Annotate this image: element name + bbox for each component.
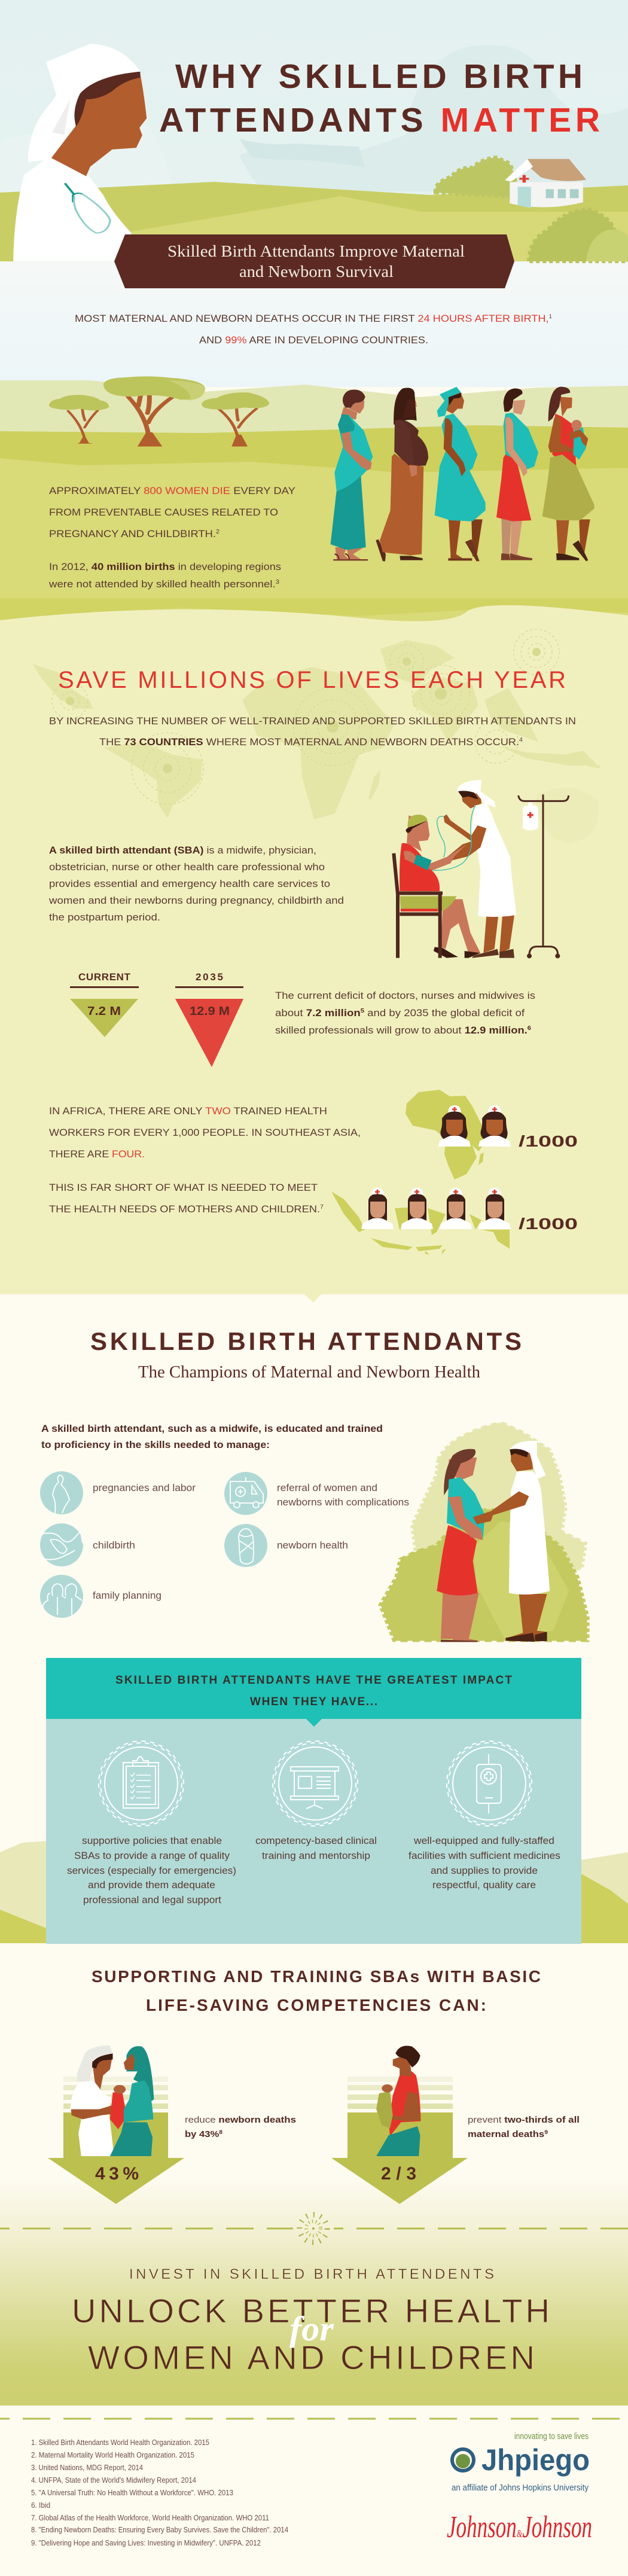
references: 5. "A Universal Truth: No Health Without a Workforce". WHO. 2013 — [31, 2488, 233, 2497]
heading: supporting and training: SUPPORTING AND TRAINING SBAs WITH BASIC — [92, 1967, 541, 1986]
map: Southeast Asia with four nurses — [331, 1188, 578, 1255]
divider — [0, 2418, 628, 2420]
text: Africa and Southeast Asia: IN AFRICA, THERE ARE ONLY TWO TRAINED HEALTH — [49, 1105, 327, 1117]
references: 1. Skilled Birth Attendants World Health Organization. 2015 — [31, 2438, 209, 2447]
heading: supporting and training: LIFE-SAVING COMPETENCIES CAN: — [146, 1996, 486, 2014]
text: 40 million births: were not attended by skilled health personnel. — [49, 579, 250, 590]
illustration: midwife with pregnant woman and bushes — [380, 1422, 587, 1642]
text: facilities: and supplies to provide — [431, 1865, 538, 1876]
woman 1 — [331, 389, 373, 560]
label: pregnancies and labor: pregnancies and labor — [93, 1483, 196, 1493]
text: facilities: facilities with sufficient medicines — [408, 1851, 560, 1861]
text: Africa and Southeast Asia — [49, 1105, 361, 1215]
text: deficit: skilled professionals will grow to about 12.9 million. — [275, 1025, 521, 1036]
panel heading: WHEN THEY HAVE... — [250, 1696, 377, 1708]
midwife — [70, 2045, 118, 2156]
IV stand — [519, 794, 569, 958]
label: referral: referral of women and — [277, 1483, 377, 1493]
clouds — [0, 45, 628, 191]
text: Africa and Southeast Asia: 7 — [320, 1204, 324, 1211]
icon: ambulance referral — [224, 1472, 267, 1515]
label: referral — [277, 1483, 409, 1508]
hills behind impact panel — [0, 1841, 628, 1943]
title: WHY SKILLED BIRTH — [175, 57, 583, 96]
text: policies: SBAs to provide a range of quality — [74, 1851, 230, 1861]
logo: Jhpiego: innovating to save lives — [514, 2431, 589, 2441]
stethoscope — [65, 183, 75, 195]
background: hero sky — [0, 0, 628, 261]
text: reduce newborn deaths: by 43% — [185, 2130, 215, 2139]
figure: midwife portrait — [13, 44, 147, 261]
text: deficit: 5 — [361, 1008, 365, 1014]
title: ATTENDANTS MATTER — [159, 101, 600, 139]
2035 label: 2035 — [196, 971, 223, 983]
woman 5 — [542, 387, 595, 561]
ornament: starburst divider — [0, 2215, 628, 2242]
woman 2 — [376, 388, 428, 561]
text: Africa and Southeast Asia: THERE ARE FOUR. — [49, 1148, 145, 1160]
text: policies: and provide them adequate — [88, 1880, 215, 1891]
heading: unlock better health: WOMEN AND CHILDREN — [88, 2339, 535, 2376]
text: policies: professional and legal support — [83, 1895, 221, 1906]
logo: Johnson and Johnson: Johnson&Johnson — [447, 2510, 592, 2544]
text: training — [255, 1836, 377, 1861]
text: 73 countries: THE 73 COUNTRIES WHERE MOST MATERNAL AND NEWBORN DEATHS OCCUR. — [99, 736, 499, 748]
background: closing gradient — [0, 2177, 628, 2406]
notch: section pointer — [304, 1294, 321, 1303]
banner: subtitle: Skilled Birth Attendants Improve Maternal — [167, 242, 465, 260]
text: deficit: 6 — [528, 1025, 531, 1032]
text: prevent two-thirds — [468, 2115, 580, 2139]
text: facilities: well-equipped and fully-staffed — [413, 1836, 554, 1846]
text: 800 women: FROM PREVENTABLE CAUSES RELATED TO — [49, 507, 278, 518]
text: reduce newborn deaths: 8 — [219, 2129, 222, 2135]
text: invest: INVEST IN SKILLED BIRTH ATTENDENTS — [129, 2266, 494, 2282]
logo: Jhpiego — [452, 2431, 590, 2493]
patient — [400, 815, 480, 958]
text: training: training and mentorship — [262, 1851, 370, 1861]
background: lower savanna and map area — [0, 616, 628, 1294]
text: skills intro: to proficiency in the skills needed to manage: — [41, 1440, 270, 1450]
label: childbirth: childbirth — [93, 1540, 135, 1551]
text: policies: services (especially for emergencies) — [67, 1865, 236, 1876]
text: SBA definition: A skilled birth attendant (SBA) is a midwife, physician, — [49, 845, 316, 856]
icon: childbirth — [40, 1523, 83, 1566]
heading: save millions: SAVE MILLIONS OF LIVES EACH YEAR — [58, 667, 566, 693]
arrow: two-thirds with mother: 2/3 — [381, 2164, 416, 2184]
map: Africa with two nurses: /1000 — [519, 1132, 578, 1150]
references — [31, 2438, 288, 2547]
text: deficit: about 7.2 million — [275, 1008, 354, 1019]
triangle: current: 7.2 M — [87, 1005, 121, 1018]
panel heading: SKILLED BIRTH ATTENDANTS HAVE THE GREATEST IMPACT — [115, 1674, 512, 1687]
logo: Jhpiego: Jhpiego — [481, 2443, 590, 2477]
chart: workforce deficit — [70, 971, 243, 1067]
2035 label — [175, 971, 243, 988]
map: Africa with two nurses — [406, 1090, 578, 1179]
hills: savanna — [0, 380, 628, 634]
text: deficit — [275, 990, 535, 1036]
panel heading — [115, 1674, 512, 1708]
text: 800 women — [49, 485, 295, 539]
text: SBA definition: obstetrician, nurse or other health care professional who — [49, 862, 325, 873]
chair back — [394, 853, 398, 958]
references: 4. UNFPA, State of the World's Midwifery Report, 2014 — [31, 2476, 196, 2484]
subheading: champions: The Champions of Maternal and Newborn Health — [138, 1362, 480, 1382]
heading: skilled birth attendants: SKILLED BIRTH ATTENDANTS — [90, 1327, 522, 1355]
badge: policies clipboard — [99, 1741, 184, 1826]
hills: hero — [0, 157, 628, 261]
headscarf — [28, 44, 141, 162]
text: Africa and Southeast Asia: WORKERS FOR EVERY 1,000 PEOPLE. IN SOUTHEAST ASIA, — [49, 1127, 361, 1138]
text: deficit: The current deficit of doctors, nurses and midwives is — [275, 990, 535, 1001]
white coat — [13, 157, 132, 261]
heading: unlock better health: UNLOCK BETTER HEALTH — [72, 2292, 550, 2330]
references: 7. Global Atlas of the Health Workforce, World Health Organization. WHO 2011 — [31, 2513, 269, 2522]
pregnant woman — [437, 1449, 485, 1642]
mother — [110, 2046, 154, 2156]
text: 800 women: 2 — [216, 529, 220, 535]
current label: CURRENT — [78, 971, 131, 983]
badge: facilities IV bag — [447, 1741, 532, 1826]
text: skills intro: A skilled birth attendant, such as a midwife, is educated and trained — [41, 1423, 383, 1434]
icon: family planning — [40, 1575, 83, 1618]
text: SBA definition: provides essential and emergency health care services to — [49, 879, 330, 889]
badge: training presentation board — [273, 1741, 358, 1826]
hair — [74, 72, 140, 127]
text: Africa and Southeast Asia: THE HEALTH NEEDS OF MOTHERS AND CHILDREN. — [49, 1203, 301, 1215]
background: pale band under hero — [0, 261, 628, 387]
map: Southeast Asia with four nurses: /1000 — [519, 1215, 578, 1233]
text: 800 women: APPROXIMATELY 800 WOMEN DIE EVERY DAY — [49, 485, 295, 496]
text: 40 million births — [48, 562, 281, 590]
text: reduce newborn deaths — [185, 2115, 296, 2139]
label: newborn health: newborn health — [277, 1540, 348, 1551]
text: 73 countries — [49, 715, 576, 748]
references: 3. United Nations, MDG Report, 2014 — [31, 2463, 143, 2472]
figures: five pregnant women in a line — [331, 387, 595, 561]
text: prevent two-thirds: 9 — [544, 2129, 548, 2135]
text: 24 hours statement: 1 — [549, 313, 552, 319]
icon: newborn health — [224, 1524, 267, 1567]
text: deficit: and by 2035 the global deficit of — [364, 1008, 525, 1019]
heading: supporting and training — [92, 1967, 541, 2014]
heading: unlock better health — [72, 2292, 550, 2376]
woman 4 — [496, 388, 538, 560]
icon: clinic house — [505, 159, 586, 208]
text: 40 million births: In 2012, 40 million births in developing regions — [49, 562, 281, 572]
text: prevent two-thirds: maternal deaths — [468, 2130, 534, 2139]
title — [159, 57, 600, 139]
logo: Jhpiego: an affiliate of Johns Hopkins University — [452, 2483, 589, 2493]
triangle: 2035 — [175, 999, 243, 1067]
text: SBA definition: women and their newborns during pregnancy, childbirth and — [48, 895, 344, 906]
panel: greatest impact — [46, 1658, 581, 1944]
banner: subtitle: and Newborn Survival — [239, 263, 394, 281]
banner: subtitle — [114, 234, 514, 288]
arrow: 43 percent with mother and midwife — [48, 2045, 184, 2204]
text: facilities: respectful, quality care — [432, 1880, 536, 1891]
text: 73 countries: BY INCREASING THE NUMBER OF WELL-TRAINED AND SUPPORTED SKILLED BIRTH ATTENDANTS IN — [49, 715, 576, 727]
heading: unlock better health: for — [289, 2309, 334, 2348]
arrow: two-thirds with mother — [331, 2046, 468, 2204]
text: 800 women: PREGNANCY AND CHILDBIRTH. — [49, 528, 203, 539]
text: Africa and Southeast Asia: THIS IS FAR SHORT OF WHAT IS NEEDED TO MEET — [49, 1182, 318, 1193]
world map background — [32, 629, 601, 843]
references: 2. Maternal Mortality World Health Organization. 2015 — [31, 2450, 194, 2459]
background: cream section — [0, 1294, 628, 2576]
triangle: 2035: 12.9 M — [190, 1005, 230, 1018]
text: 40 million births: 3 — [276, 579, 279, 586]
illustration: midwife taking blood pressure — [394, 780, 569, 958]
text: 73 countries: 4 — [519, 737, 523, 743]
text: prevent two-thirds: prevent two-thirds of all — [468, 2115, 580, 2125]
icon: pregnancies and labor — [40, 1471, 83, 1514]
references: 8. "Ending Newborn Deaths: Ensuring Every Baby Survives. Save the Children". 2014 — [31, 2525, 288, 2534]
text: 24 hours statement — [75, 313, 552, 346]
current label — [70, 971, 139, 988]
text: SBA definition: the postpartum period. — [49, 912, 160, 923]
text: reduce newborn deaths: reduce newborn deaths — [185, 2115, 296, 2125]
chair front — [398, 892, 443, 958]
baby — [110, 2085, 126, 2129]
trees: acacia — [49, 376, 269, 447]
midwife — [473, 1441, 550, 1642]
arrow: 43 percent with mother and midwife: 43% — [95, 2164, 139, 2184]
references: 9. "Delivering Hope and Saving Lives: Investing in Midwifery". UNFPA. 2012 — [31, 2538, 261, 2547]
nurse — [432, 780, 516, 958]
triangle: current — [70, 999, 138, 1037]
woman 3 — [435, 387, 486, 561]
text: policies: supportive policies that enable — [82, 1836, 222, 1846]
text: 24 hours statement: MOST MATERNAL AND NEWBORN DEATHS OCCUR IN THE FIRST 24 HOURS AFTER BIRTH, — [75, 313, 540, 324]
text: policies — [67, 1836, 236, 1906]
text: training: competency-based clinical — [255, 1836, 377, 1846]
label: family planning: family planning — [93, 1590, 161, 1601]
references: 6. Ibid — [31, 2501, 50, 2510]
label: referral: newborns with complications — [277, 1497, 409, 1508]
text: skills intro — [41, 1423, 383, 1450]
face and neck — [50, 75, 147, 176]
text: SBA definition — [48, 845, 344, 923]
text: 24 hours statement: AND 99% ARE IN DEVELOPING COUNTRIES. — [199, 334, 428, 346]
text: facilities — [408, 1836, 560, 1891]
